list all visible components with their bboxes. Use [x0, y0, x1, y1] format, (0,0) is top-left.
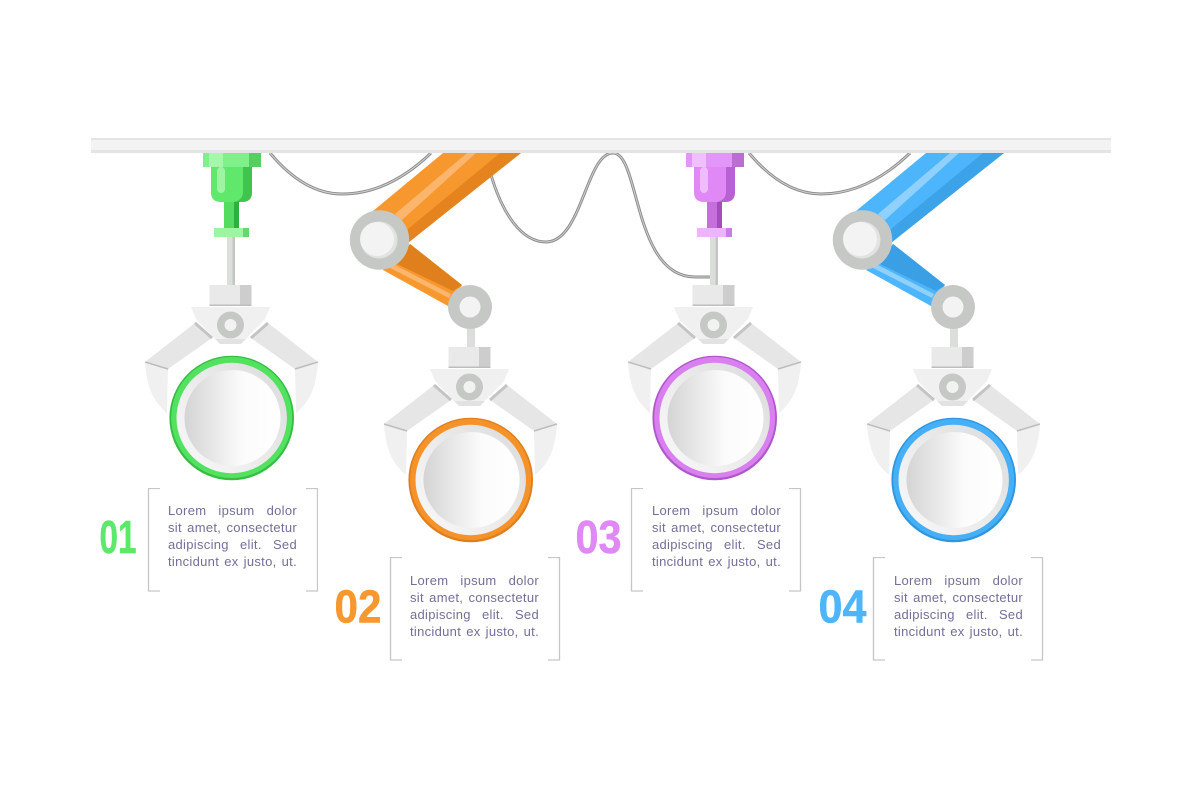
callout 04: [818, 557, 1044, 661]
callout 03: 03: [576, 511, 622, 563]
robot 3: purple ring: [652, 356, 777, 480]
robot 3: purple mount: [686, 153, 744, 237]
callout 01: tincidunt ex justo, ut.: [168, 554, 297, 568]
callout 01: Lorem ipsum dolor: [168, 502, 297, 518]
callout 04: adipiscing elit. Sed: [894, 606, 1023, 622]
callout 04: tincidunt ex justo, ut.: [894, 624, 1023, 638]
robot 1: green ring: [169, 356, 294, 480]
callout 04: 04: [818, 580, 867, 632]
callout 04: Lorem ipsum dolor: [894, 572, 1023, 588]
robot 4: blue arm: [833, 153, 1004, 348]
ceiling rail: [91, 138, 1111, 153]
callout 01: sit amet, consectetur: [168, 520, 297, 534]
callout 03: adipiscing elit. Sed: [652, 536, 781, 552]
robot 4: gripper: [867, 347, 1040, 475]
callout 02: tincidunt ex justo, ut.: [410, 624, 539, 638]
callout 01: adipiscing elit. Sed: [168, 536, 297, 552]
callout 02: adipiscing elit. Sed: [410, 606, 539, 622]
callout 03: sit amet, consectetur: [652, 520, 781, 534]
robot 1: gripper: [145, 285, 318, 413]
callout 04: sit amet, consectetur: [894, 590, 1023, 604]
robot 1: rod: [227, 237, 235, 285]
callout 03: Lorem ipsum dolor: [652, 502, 781, 518]
wire: first loop: [270, 153, 431, 194]
wire: middle cable: [491, 153, 711, 277]
wire: third loop: [749, 153, 910, 194]
callout 02: sit amet, consectetur: [410, 590, 539, 604]
callout 02: 02: [334, 580, 382, 632]
callout 03: [576, 488, 802, 592]
robot 2: orange ring: [408, 418, 533, 542]
callout 03: tincidunt ex justo, ut.: [652, 554, 781, 568]
callout 01: [100, 488, 318, 592]
callout 02: Lorem ipsum dolor: [410, 572, 539, 588]
robot 2: orange arm: [350, 153, 521, 348]
robot 1: green mount: [203, 153, 261, 237]
robot 2: gripper: [384, 347, 557, 475]
robot 4: blue ring: [891, 418, 1016, 542]
callout 01: 01: [100, 511, 136, 563]
callout 02: [334, 557, 560, 661]
robot 3: gripper: [628, 285, 801, 413]
robot 3: rod: [710, 237, 718, 285]
